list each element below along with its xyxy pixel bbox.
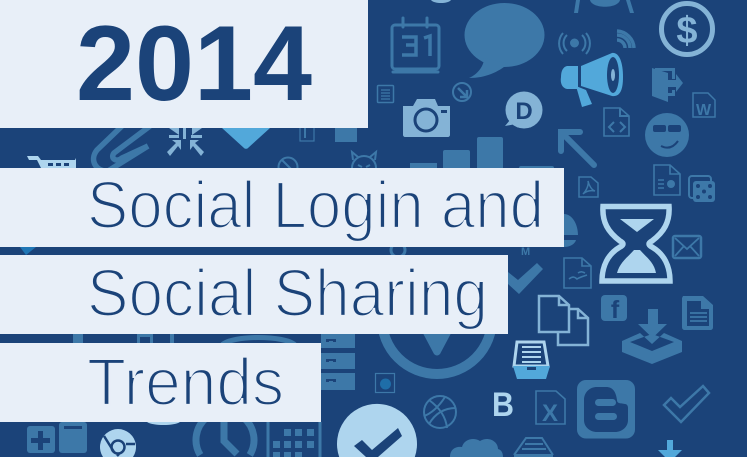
icon: speech bubble — [464, 3, 544, 78]
shapes peeking between bars two and three — [73, 334, 295, 345]
icon: bar chart — [410, 137, 554, 175]
icon: cloud — [450, 439, 503, 457]
icon: dollar coin: $ — [676, 10, 698, 52]
icon: light circle below bar — [147, 422, 180, 425]
icon: calculator — [27, 422, 87, 453]
icon: megaphone — [561, 53, 623, 107]
panel: title line two — [0, 255, 508, 334]
icon: square block — [335, 126, 357, 142]
icon: broadcast signal — [559, 33, 590, 54]
icon: circled arrow — [453, 83, 471, 101]
icon: file cabinet drawers — [321, 334, 355, 390]
icon: disqus — [505, 92, 542, 128]
icon: facebook — [601, 295, 627, 324]
icon: no sign — [278, 158, 298, 176]
icon: down arrow — [658, 440, 682, 457]
icon: arrow up-left — [561, 132, 594, 165]
icon: inbox tray — [514, 438, 553, 456]
icon: devil face — [352, 152, 376, 180]
icon: text document — [682, 296, 713, 330]
icon: small document — [378, 86, 394, 102]
icon: paperclip — [94, 126, 150, 171]
icon: disqus: D — [515, 98, 533, 125]
panel: year banner — [0, 0, 368, 128]
icon: clock — [196, 411, 254, 455]
icon: basketball — [424, 396, 456, 428]
icon: letter B: B — [492, 386, 514, 424]
panel: title line one — [0, 168, 564, 247]
icon: chrome — [100, 429, 136, 457]
heading: 2014: 2014 — [76, 3, 312, 123]
icon: facebook: f — [611, 296, 620, 324]
icon: large circle with heart — [382, 264, 492, 374]
heading: Social Login and: Social Login and — [87, 168, 544, 243]
icon: dice — [689, 176, 715, 202]
icon: code document — [604, 108, 629, 136]
icon: pdf document — [579, 177, 598, 197]
icon: top figure — [574, 0, 634, 13]
icon: hourglass — [602, 206, 670, 281]
icon: check mark — [508, 263, 543, 294]
icon: sunglasses smiley — [645, 113, 689, 157]
heading: Social Sharing: Social Sharing — [87, 256, 488, 331]
icon: check badge — [337, 404, 417, 457]
icon: calendar grid — [268, 422, 320, 457]
gap details between title bars: M — [521, 246, 530, 258]
panel: title line three — [0, 343, 321, 422]
icon: top circle — [431, 0, 451, 3]
icon: file archive tray — [513, 342, 550, 379]
icon: word document — [693, 93, 715, 119]
icon: download box — [622, 309, 682, 364]
icon: calendar — [392, 18, 439, 72]
heading: Trends: Trends — [87, 345, 284, 420]
icon: birds document — [564, 258, 591, 288]
gap details between title bars — [20, 214, 578, 258]
icon: rss — [617, 31, 634, 48]
icon: blue diamond — [222, 128, 270, 149]
icon: stacked documents — [539, 296, 588, 345]
icon: outlined check — [664, 386, 709, 422]
icon: word document: W — [696, 102, 712, 119]
icon: camera — [403, 99, 450, 137]
icon: small notepad — [300, 126, 314, 141]
icon: blogger — [577, 380, 635, 438]
icon: excel document: X — [542, 400, 558, 427]
icon: collapse arrows — [167, 128, 204, 156]
icon: small dribbble box — [376, 374, 394, 392]
icon: dollar coin — [662, 4, 712, 54]
icon: excel document — [536, 391, 565, 427]
icon: envelope — [673, 236, 701, 258]
icon: exit door — [652, 68, 683, 102]
icon: shopping cart — [27, 156, 76, 170]
icon: report document — [654, 165, 680, 195]
